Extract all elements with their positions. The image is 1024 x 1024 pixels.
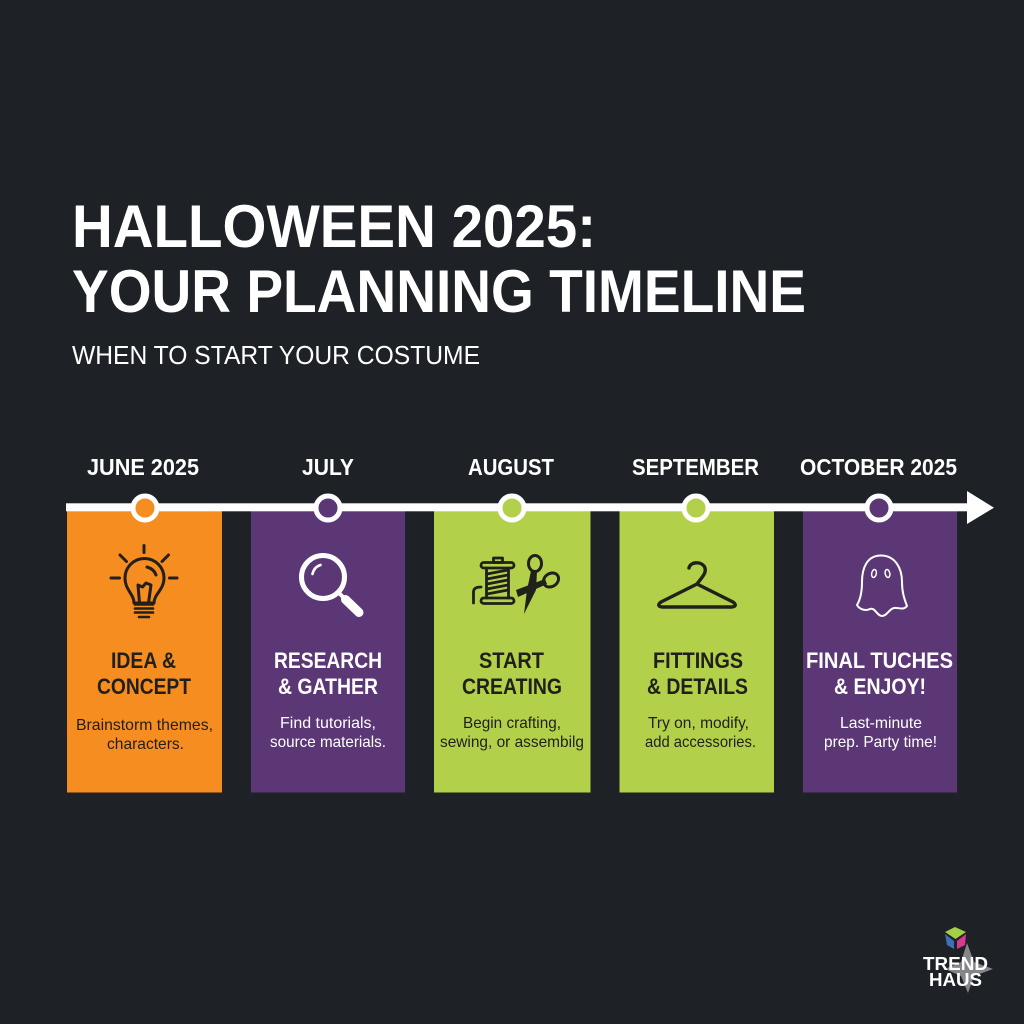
icon: thread spool and scissors	[474, 556, 561, 614]
timeline node: September	[684, 496, 708, 520]
scissors	[516, 556, 561, 614]
month label: September: SEPTEMBER	[632, 454, 759, 480]
icon: magnifying glass	[302, 556, 359, 612]
panel: October	[803, 510, 957, 792]
card background: October	[803, 510, 957, 792]
icon: clothes hanger	[659, 563, 735, 607]
timeline arrow	[66, 491, 994, 524]
card title: October: FINAL TUCHES	[806, 648, 953, 673]
card title: July: RESEARCH	[274, 648, 382, 673]
card title: June	[97, 648, 191, 699]
card description: June: characters.	[107, 736, 184, 753]
timeline node: June	[133, 496, 157, 520]
card description: August	[440, 715, 584, 751]
card title: October: & ENJOY!	[834, 674, 926, 699]
card title: June: IDEA &	[111, 648, 176, 673]
logo wordmark: TREND	[923, 953, 988, 974]
card description: September: Try on, modify,	[648, 715, 749, 732]
logo wordmark: HAUS	[929, 970, 982, 990]
panel: June	[67, 510, 222, 792]
card background: September	[620, 510, 774, 792]
card background: July	[251, 510, 405, 792]
card description: July: source materials.	[270, 734, 386, 751]
card description: June	[76, 717, 213, 753]
timeline node: August	[500, 496, 524, 520]
title: HALLOWEEN 2025:	[72, 193, 596, 260]
timeline node: October	[867, 496, 891, 520]
subtitle: WHEN TO START YOUR COSTUME	[72, 340, 480, 370]
card title: August: START	[479, 648, 544, 673]
sparkle watermark	[945, 943, 993, 993]
card background: August	[434, 510, 590, 792]
card description: August: Begin crafting,	[463, 715, 561, 732]
card description: September: add accessories.	[645, 734, 756, 751]
card description: October: Last-minute	[840, 715, 922, 732]
card title: July: & GATHER	[278, 674, 378, 699]
panel: September	[620, 510, 774, 792]
month label: June 2025: JUNE 2025	[87, 454, 199, 480]
card title: October	[806, 648, 953, 699]
card description: August: sewing, or assembilg	[440, 734, 584, 751]
panel: August	[434, 510, 590, 792]
panel: July	[251, 510, 405, 792]
timeline node: July	[316, 496, 340, 520]
card title: September	[647, 648, 748, 699]
card title: September: FITTINGS	[653, 648, 743, 673]
card title: August	[462, 648, 562, 699]
icon: light bulb	[111, 546, 177, 617]
card description: October: prep. Party time!	[824, 734, 937, 751]
card title: July	[274, 648, 382, 699]
logo wordmark	[923, 953, 988, 990]
card title: June: CONCEPT	[97, 674, 191, 699]
title	[72, 193, 806, 325]
icon: cube	[945, 927, 966, 949]
card title: August: CREATING	[462, 674, 562, 699]
card description: June: Brainstorm themes,	[76, 717, 213, 734]
logo: Trend Haus	[923, 927, 993, 993]
card description: September	[645, 715, 756, 751]
card title: September: & DETAILS	[647, 674, 748, 699]
month label: October 2025: OCTOBER 2025	[800, 454, 957, 480]
thread spool	[474, 558, 514, 604]
card description: July	[270, 715, 386, 751]
icon: ghost	[857, 556, 907, 616]
month label: August: AUGUST	[468, 454, 554, 480]
month label: July: JULY	[302, 454, 354, 480]
card description: July: Find tutorials,	[280, 715, 376, 732]
card background: June	[67, 510, 222, 792]
title: YOUR PLANNING TIMELINE	[72, 258, 806, 325]
card description: October	[824, 715, 937, 751]
